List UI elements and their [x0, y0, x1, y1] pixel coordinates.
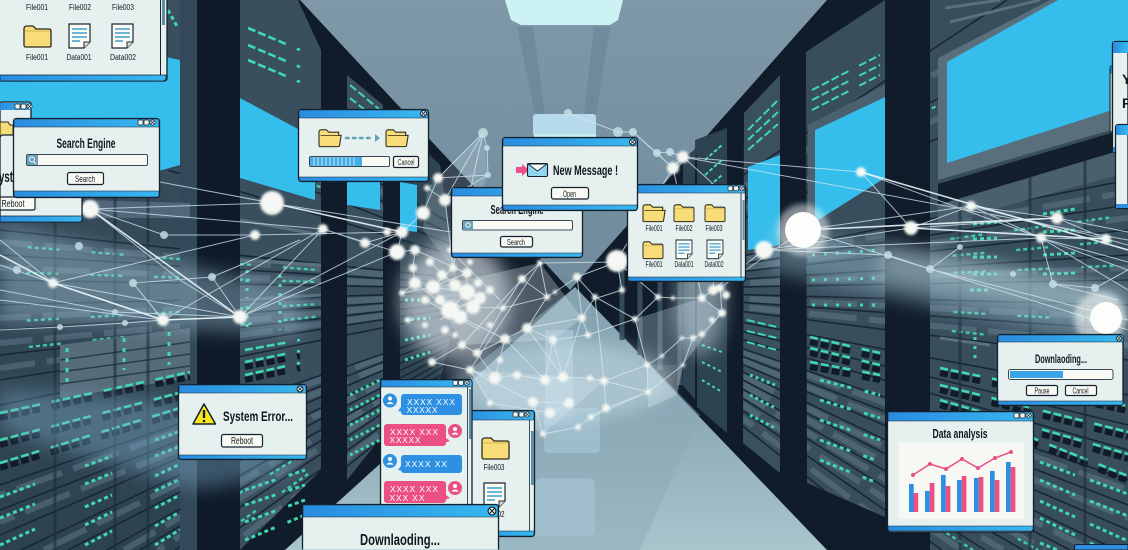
bar and line chart	[899, 443, 1024, 519]
transfer arrow	[346, 134, 380, 142]
search field	[26, 154, 148, 166]
connection lines	[397, 113, 722, 434]
window: new message	[502, 138, 638, 210]
left rack: near	[0, 0, 197, 550]
file labels row 1: File001	[646, 224, 663, 233]
floor reflections	[470, 287, 700, 550]
button: search: Search	[75, 174, 95, 184]
glowing large nodes	[777, 204, 1126, 344]
window: right edge lower	[1116, 124, 1128, 208]
main nodes	[48, 151, 1111, 437]
progress bar	[310, 156, 390, 166]
button: cancel: Cancel	[1072, 386, 1089, 396]
file labels row 1: File002	[676, 224, 693, 233]
pillar	[197, 0, 240, 550]
button: reboot: Reboot	[2, 199, 25, 210]
message bubble 3	[383, 454, 462, 473]
file labels row 2: File001	[646, 260, 663, 269]
right rack: near	[930, 0, 1128, 550]
left rack: far	[400, 154, 460, 379]
message bubble 1: XXXX XXX	[407, 397, 455, 407]
window: new message: New Message !	[553, 162, 618, 178]
right rack: far	[610, 128, 727, 433]
message bubble 1: XXXXX	[406, 405, 438, 415]
window: system error: System Error...	[223, 408, 293, 424]
file labels row 2: Data001	[66, 53, 92, 62]
window: file browser behind chat: 02	[498, 510, 505, 519]
ceiling	[300, 0, 827, 290]
file labels row 1	[26, 3, 134, 12]
file labels row 1: File003	[112, 3, 134, 12]
floor	[285, 287, 827, 550]
window: data analysis: Data analysis	[932, 426, 988, 441]
file labels row 2	[26, 53, 136, 62]
icon: document	[484, 483, 505, 507]
globe haze	[400, 133, 725, 434]
window: downloading right	[998, 334, 1123, 406]
message bubble 4: XXX XX	[390, 493, 425, 503]
trend line	[911, 450, 1013, 477]
haze	[0, 225, 1128, 490]
window: file browser centre right	[628, 184, 746, 282]
message bubble 1	[383, 394, 462, 415]
ceiling light fixtures	[505, 0, 623, 160]
button: open: Open	[563, 189, 576, 199]
button: cancel: Cancel	[398, 157, 415, 167]
window: search engine left: Search Engine	[56, 135, 116, 151]
network globe and connection lines	[0, 109, 1128, 437]
window: right edge top	[1112, 42, 1128, 152]
message bubble 4: XXXX XXX	[390, 484, 438, 494]
message bubble 3: XXXX XX	[405, 459, 447, 469]
message bubble 4	[384, 481, 462, 503]
button: reboot: Reboot	[231, 436, 253, 447]
icons row 2	[643, 240, 723, 259]
icon: target folder	[386, 130, 408, 147]
window: partly hidden file browser left	[0, 102, 32, 147]
message bubble 2: XXXXX	[390, 435, 421, 445]
file labels row 1: File002	[69, 3, 91, 12]
window: search engine left	[14, 118, 160, 198]
icon: source folder	[319, 130, 341, 147]
right rack: third	[743, 75, 780, 473]
window: search engine centre: Search Engine	[490, 202, 544, 217]
window: downloading bottom	[302, 504, 498, 550]
pink bars	[914, 467, 1015, 512]
left rack: second	[240, 0, 322, 550]
window: data analysis	[888, 412, 1034, 532]
button: search: Search	[507, 237, 525, 247]
window: chat messages	[380, 380, 472, 520]
file labels row 2: Data002	[704, 260, 724, 269]
progress bar	[1008, 370, 1113, 380]
icons row 1	[643, 205, 725, 222]
icon: document 2	[112, 24, 133, 48]
window: downloading right: Downlaoding...	[1035, 354, 1087, 366]
left rack: third	[347, 75, 383, 480]
blue bars	[909, 462, 1011, 512]
message bubble 2	[384, 424, 462, 446]
icon: pink arrow	[516, 164, 529, 176]
window: file browser behind chat	[462, 410, 534, 536]
window: bottom right corner	[1074, 544, 1128, 550]
window: downloading bottom: Downlaoding...	[360, 532, 440, 549]
file labels row 2: Data001	[674, 260, 694, 269]
message bubble 2: XXXX XXX	[390, 427, 438, 437]
window: file transfer	[298, 110, 428, 182]
button: search	[68, 172, 104, 184]
window: search engine centre	[452, 188, 582, 258]
icon: envelope	[528, 164, 548, 176]
file labels row 1: File003	[706, 224, 723, 233]
file labels row 1: File001	[26, 3, 48, 12]
file labels row 2: Data002	[110, 53, 136, 62]
file labels row 2: File001	[26, 53, 48, 62]
window: partly hidden system error	[0, 135, 82, 222]
icon: warning triangle	[193, 404, 216, 424]
window: file browser behind chat: File003	[484, 463, 505, 472]
file labels row 2	[646, 260, 724, 269]
window: system error	[178, 384, 306, 460]
search field	[462, 220, 572, 230]
small nodes	[13, 109, 1099, 330]
icon: folder	[482, 438, 509, 459]
button: pause: Pause	[1034, 386, 1050, 396]
file labels row 1	[646, 224, 723, 233]
window: right edge back	[1110, 66, 1128, 132]
icon: document	[69, 24, 90, 48]
icon: folder	[24, 26, 51, 47]
window: file browser top left	[0, 0, 167, 81]
right rack: second	[806, 0, 885, 517]
